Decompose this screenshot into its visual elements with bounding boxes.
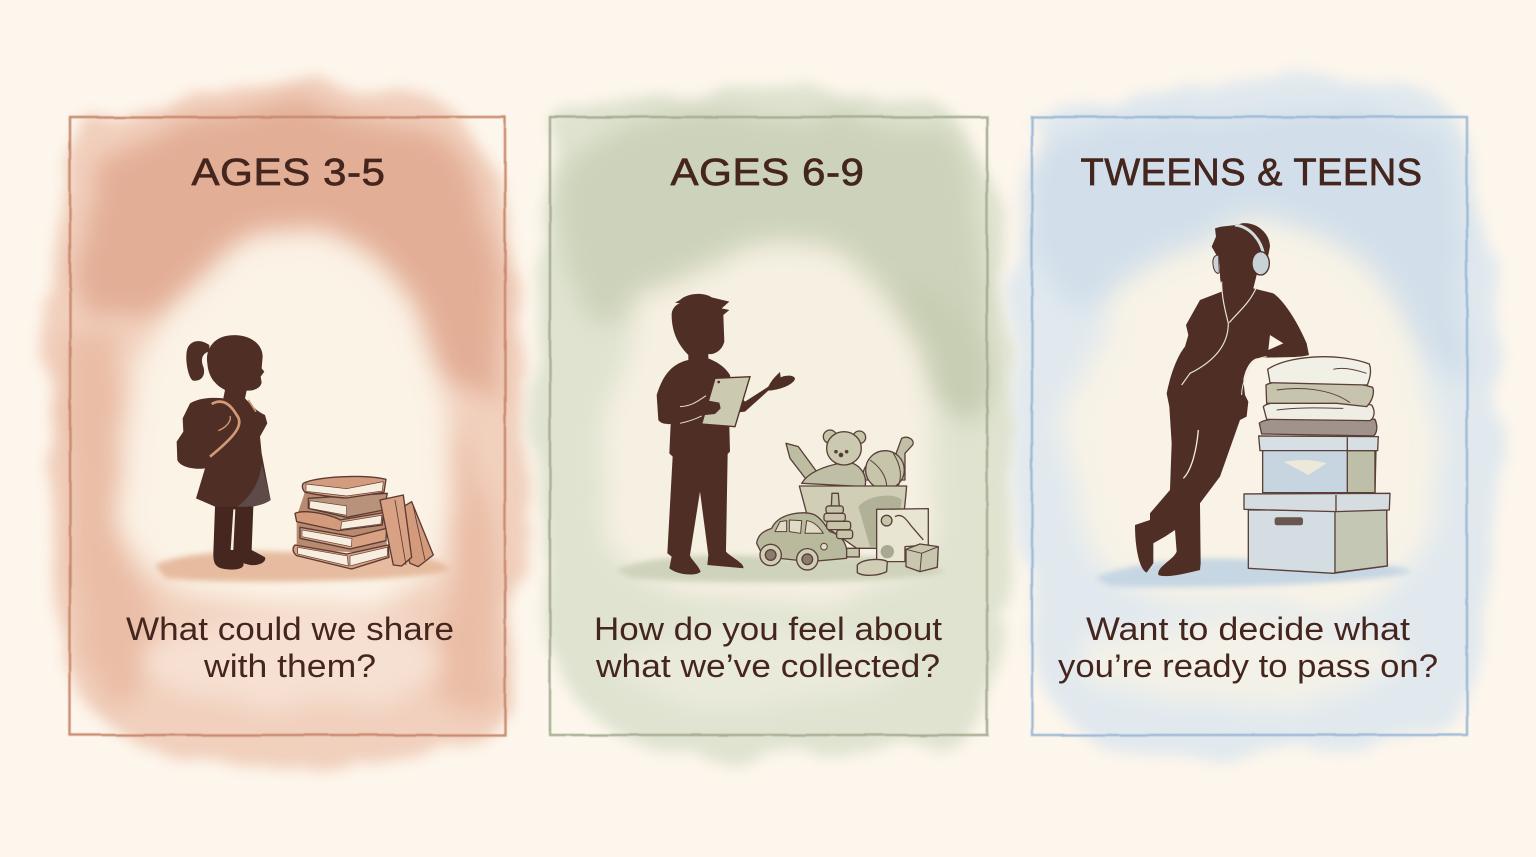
illustration: toy pile [757,430,938,575]
prompt text: what we’ve collected? [595,648,940,684]
prompt text [594,611,942,684]
illustration: stack of books [293,476,433,569]
panel: ages 3-5 [51,83,524,772]
panel: tweens and teens [1013,78,1498,759]
card frame [550,117,987,735]
card frame [70,117,505,735]
prompt text: you’re ready to pass on? [1058,648,1438,684]
floor shadow [615,555,945,583]
watercolor wash: terracotta [51,83,524,772]
watercolor wash: blue [1013,78,1498,759]
prompt text: How do you feel about [594,611,942,647]
prompt text [126,611,454,684]
watercolor wash: sage [531,89,1016,759]
prompt text: Want to decide what [1086,611,1410,647]
illustration: teen with headphones [1135,223,1309,576]
illustration: folded clothes and boxes [1244,357,1390,573]
prompt text: What could we share [126,611,454,647]
card frame [1032,117,1467,735]
heading: TWEENS & TEENS [1080,152,1422,194]
illustration: boy with tablet [657,294,795,575]
heading: AGES 6-9 [670,152,864,194]
panel: ages 6-9 [531,89,1016,759]
floor shadow [155,551,450,582]
heading: AGES 3-5 [192,152,386,194]
prompt text [1058,611,1438,684]
prompt text: with them? [203,648,376,684]
floor shadow [1095,558,1412,587]
illustration: girl with backpack [177,335,271,570]
